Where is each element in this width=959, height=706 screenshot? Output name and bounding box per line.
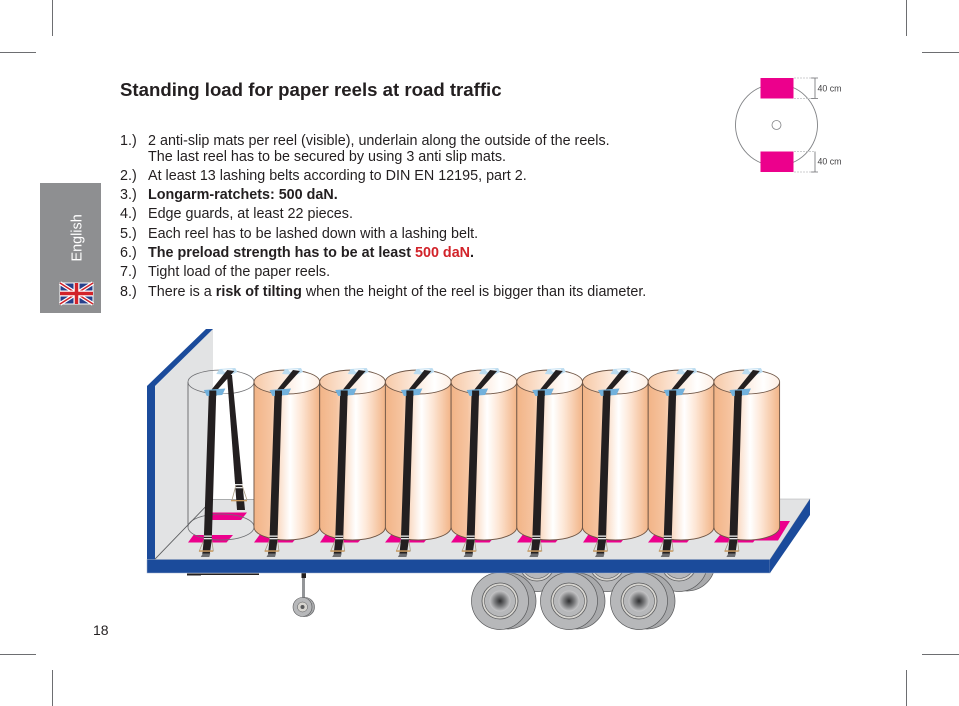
instructions list: 2.) — [120, 168, 137, 184]
landing gear — [293, 573, 314, 616]
language tab — [40, 183, 101, 313]
instructions list: 8.) — [120, 284, 137, 300]
instructions list: 3.) — [120, 187, 137, 203]
bed front beam — [147, 560, 770, 573]
instructions list: 2 anti-slip mats per reel (visible), underlain along the outside of the reels. — [148, 133, 610, 149]
reel 1: transparent outline — [155, 370, 254, 559]
instructions list: The preload strength has to be at least 500 daN. — [148, 245, 474, 261]
item 6 — [120, 245, 474, 261]
headboard wall — [155, 329, 213, 559]
instructions list: 4.) — [120, 206, 137, 222]
item 3 — [120, 187, 338, 203]
rear wheels — [508, 534, 715, 592]
instructions list: 7.) — [120, 264, 137, 280]
title: Standing load for paper reels at road traffic — [120, 79, 502, 100]
dimension label bottom: 40 cm — [818, 156, 841, 166]
instructions list: Tight load of the paper reels. — [148, 264, 330, 280]
trailer bed — [155, 499, 810, 560]
reels 2 to 9 — [254, 370, 780, 540]
item 1 continuation: The last reel has to be secured by using 3 anti slip mats. — [148, 149, 506, 165]
language label: English: English — [70, 214, 86, 262]
item 4 — [120, 206, 353, 222]
instructions list: 6.) — [120, 245, 137, 261]
item 8 — [120, 284, 646, 300]
instructions list: 5.) — [120, 226, 137, 242]
diagram: mat placement on reel — [736, 78, 841, 172]
item 5 — [120, 226, 478, 242]
reel 1 edges redrawn over white — [188, 382, 254, 527]
instructions list: Longarm-ratchets: 500 daN. — [148, 187, 338, 203]
illustration: trailer with paper reels — [147, 329, 810, 630]
headboard post — [147, 386, 155, 573]
item 1 — [120, 133, 610, 149]
bed side beam — [770, 499, 810, 573]
instructions list: Each reel has to be lashed down with a lashing belt. — [148, 226, 478, 242]
instructions list: 1.) — [120, 133, 137, 149]
item 2 — [120, 168, 527, 184]
instructions list: At least 13 lashing belts according to DIN EN 12195, part 2. — [148, 168, 527, 184]
headboard blue edge — [147, 329, 213, 386]
item 7 — [120, 264, 330, 280]
reel 1 rear lashing strap — [227, 375, 247, 510]
underside rail — [187, 574, 259, 576]
instructions list: Edge guards, at least 22 pieces. — [148, 206, 353, 222]
icon: UK flag — [60, 283, 93, 304]
front wheels — [472, 572, 675, 630]
instructions list — [120, 133, 646, 300]
page number: 18 — [93, 622, 109, 638]
dimension label top: 40 cm — [818, 84, 841, 94]
anti-slip mats — [188, 512, 790, 542]
instructions list: There is a risk of tilting when the height of the reel is bigger than its diameter. — [148, 284, 646, 300]
lashing belts and edge guards — [199, 368, 763, 557]
